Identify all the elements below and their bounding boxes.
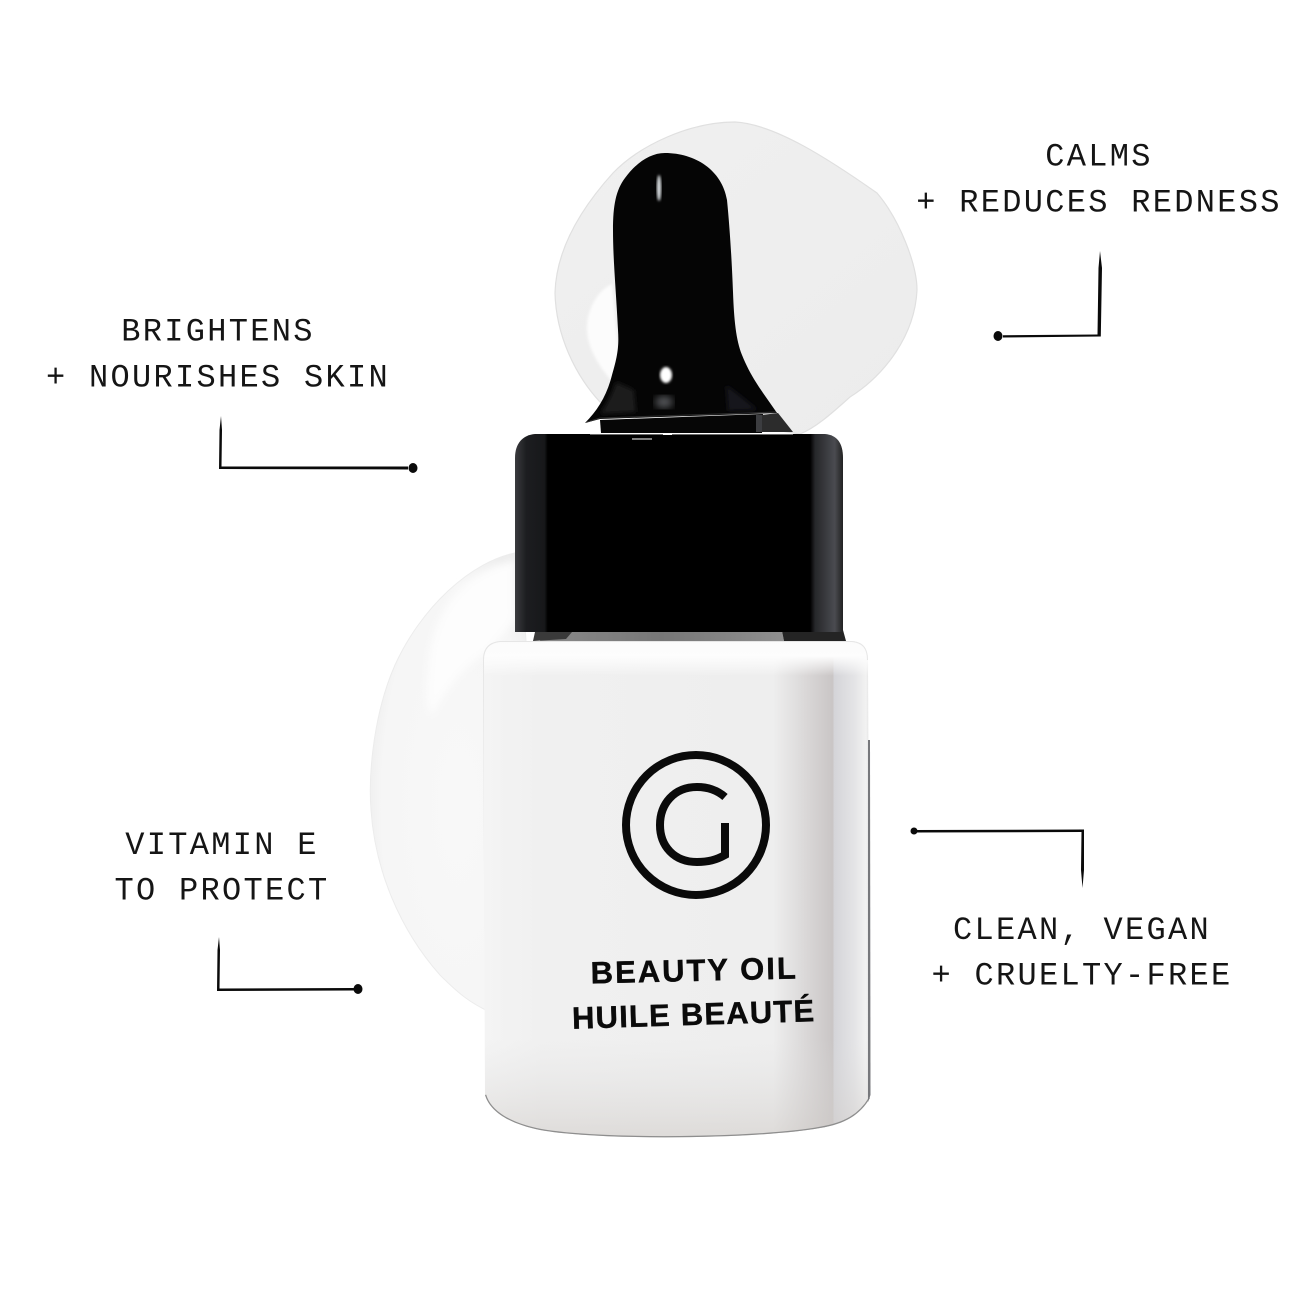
text: brightens: + NOURISHES SKIN [46, 360, 390, 396]
callout: calms [916, 138, 1282, 341]
bottle body [480, 638, 875, 1143]
oil swatch: left [370, 552, 530, 1012]
text: vitamin e [114, 827, 330, 910]
text: clean, vegan [931, 912, 1233, 994]
text: calms: CALMS [1045, 138, 1153, 176]
product name [571, 950, 816, 1036]
neck ring [600, 414, 763, 433]
dropper bulb [585, 153, 793, 433]
text: calms: + REDUCES REDNESS [916, 184, 1282, 222]
leader line: clean, vegan [910, 828, 1084, 888]
collar ring shadow [533, 630, 846, 641]
oil swatch: top [555, 122, 917, 434]
leader line: brightens [219, 416, 418, 473]
text: calms [916, 138, 1282, 222]
product name: HUILE BEAUTÉ [571, 993, 816, 1036]
collar cap [515, 434, 843, 632]
text: vitamin e: VITAMIN E [125, 827, 319, 864]
text: brightens: BRIGHTENS [121, 314, 315, 350]
leader line: calms [994, 251, 1102, 341]
callout: vitamin e [114, 827, 362, 994]
text: clean, vegan: CLEAN, VEGAN [953, 912, 1211, 949]
callout: brightens [46, 314, 418, 473]
leader line: vitamin e [217, 937, 362, 994]
infographic canvas [48, 122, 1278, 1138]
product name: BEAUTY OIL [590, 950, 798, 991]
logo [626, 755, 766, 895]
text: clean, vegan: + CRUELTY-FREE [931, 958, 1233, 994]
dark right edge of bottle [868, 740, 870, 1102]
dropper bottle [480, 153, 875, 1143]
text: vitamin e: TO PROTECT [114, 872, 330, 910]
text: brightens [46, 314, 390, 396]
callout: clean, vegan [910, 828, 1233, 994]
